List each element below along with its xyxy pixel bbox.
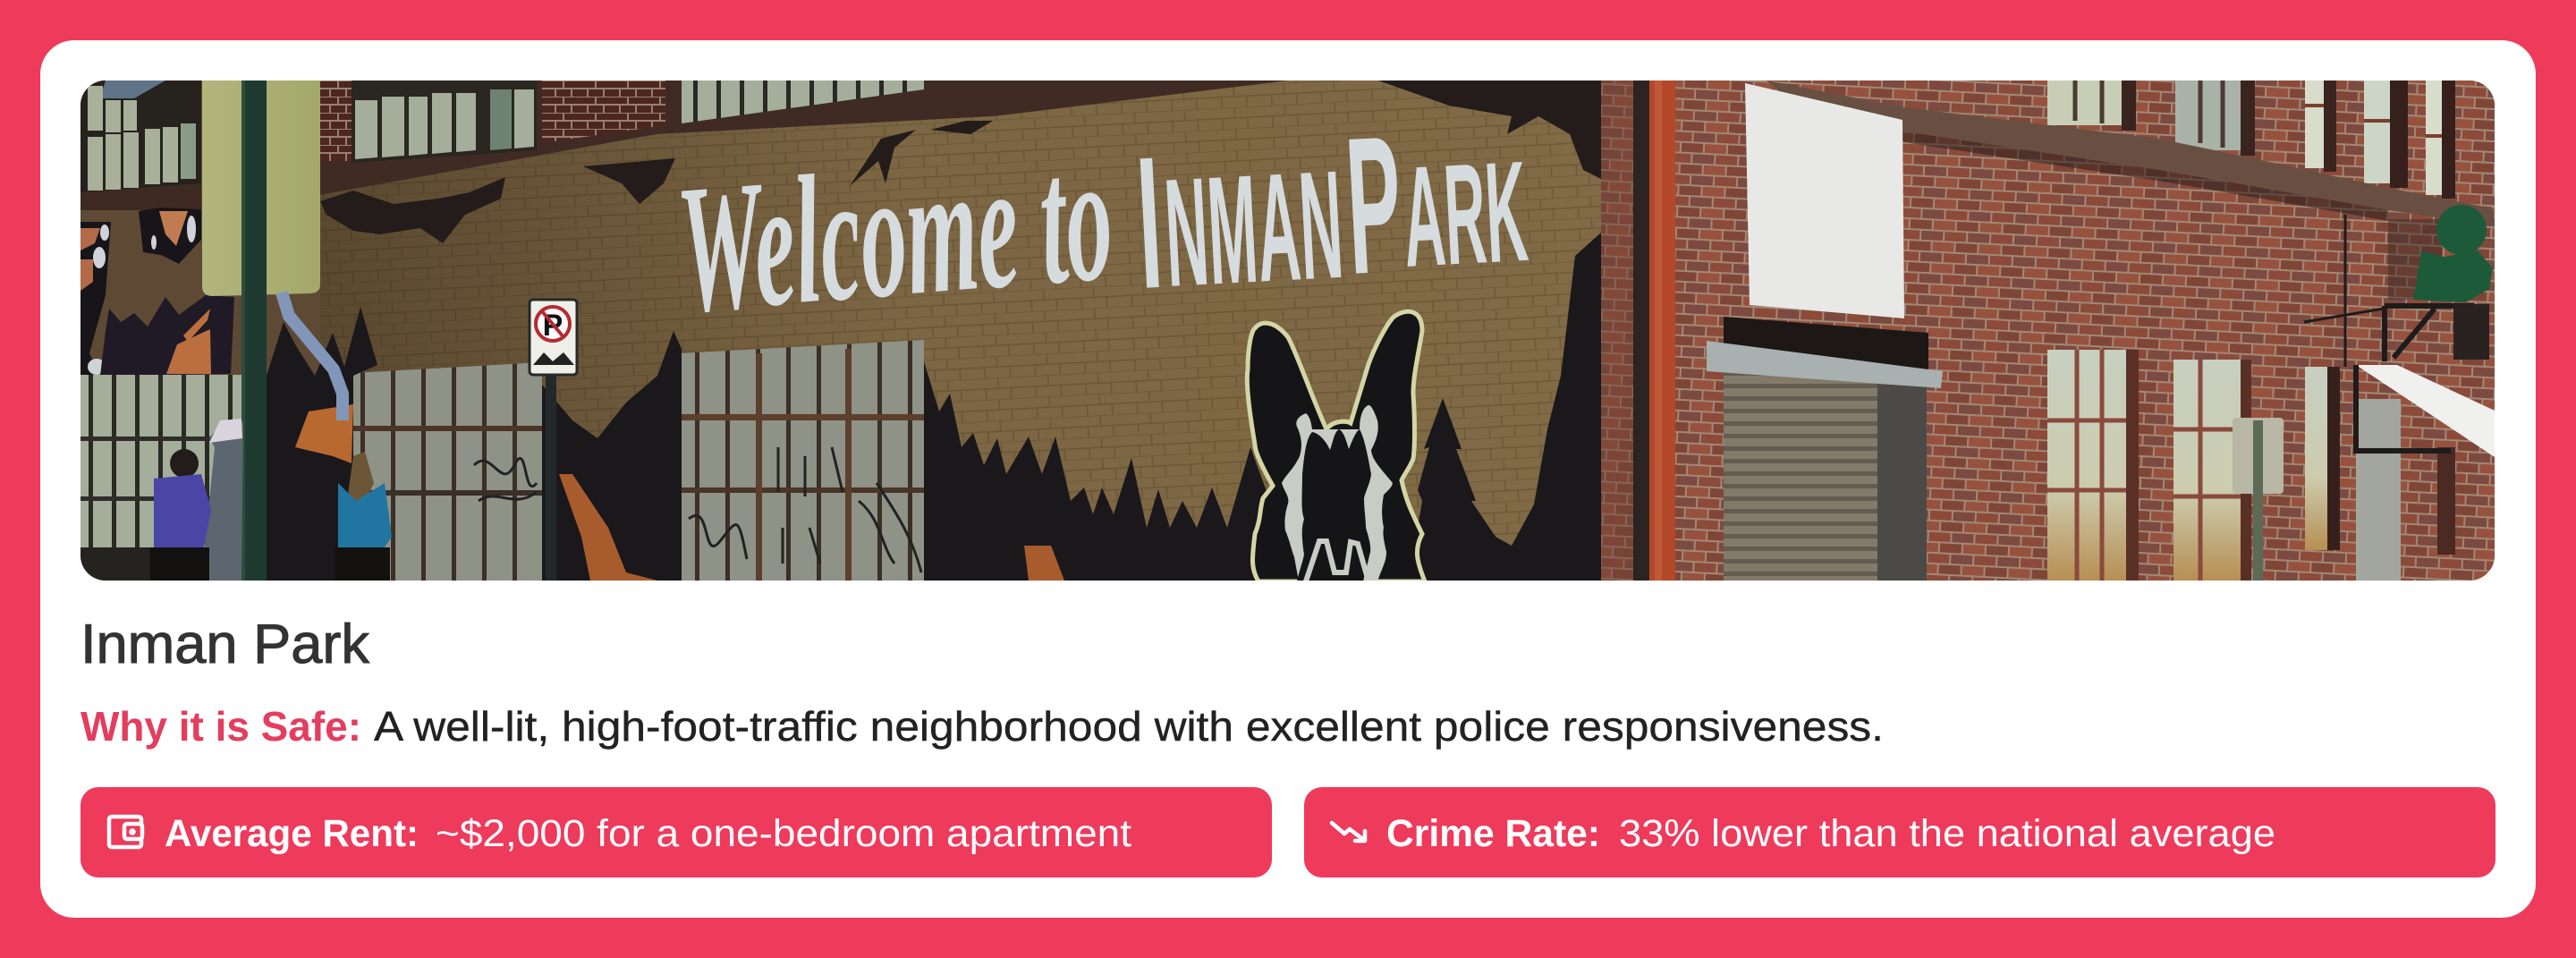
stat pill: crime rate: Crime Rate: xyxy=(1386,812,1600,855)
photo: Inman Park mural building xyxy=(80,72,2495,581)
heading: neighborhood name: Inman Park xyxy=(80,614,370,675)
upper mural windows and brick piers xyxy=(320,81,924,163)
mural rabbit-eared silhouette xyxy=(1247,311,1425,581)
three people on the sidewalk xyxy=(150,419,392,581)
black branch silhouettes xyxy=(320,81,1601,243)
green ampersand sign xyxy=(2413,205,2493,302)
stat pill: crime rate xyxy=(1304,787,2496,877)
upper dark brick band xyxy=(320,81,1377,195)
graffiti scribbles xyxy=(474,447,921,572)
mural lettering: Welcome to Inman Park xyxy=(682,138,1530,313)
mural lettering: Welcome to Inman Park: I xyxy=(1132,117,1166,328)
painted white board xyxy=(1745,83,1904,318)
stat pill: average rent: Average Rent: xyxy=(165,812,419,855)
mural lettering: Welcome to Inman Park: P xyxy=(1342,96,1406,316)
dark tree silhouettes and mural base xyxy=(267,233,1601,581)
stat pill: crime rate: 33% lower than the national average xyxy=(1619,812,2275,855)
photo: Inman Park mural building: ARK xyxy=(1399,131,1531,297)
drain pipe xyxy=(282,292,343,420)
orange butterflies in lower mural xyxy=(295,404,1064,581)
description: why it is safe: A well-lit, high-foot-traffic neighborhood with excellent police responsiveness. xyxy=(374,703,1884,750)
stat pill: average rent: ~$2,000 for a one-bedroom apartment xyxy=(436,812,1131,855)
street sign back and pole xyxy=(202,72,320,581)
loading door with metal lintel xyxy=(1707,317,1943,581)
cornice band xyxy=(1767,81,2495,225)
shop door xyxy=(2356,399,2401,581)
lower mural windows xyxy=(353,340,924,581)
mural lettering: Welcome to Inman Park: NMAN xyxy=(1161,139,1347,319)
brick building section at right xyxy=(1601,81,2495,581)
stat pill: average rent xyxy=(80,787,1272,877)
left building section with windows and butterfly xyxy=(80,81,322,581)
no parking sign and post: P xyxy=(543,309,563,343)
mural lettering: Welcome to Inman Park: Welcome to xyxy=(672,115,1119,352)
description: why it is safe: Why it is Safe: xyxy=(80,703,361,750)
right street sign back xyxy=(2233,418,2284,581)
white awning xyxy=(2356,365,2495,457)
tan painted brick wall xyxy=(320,81,1601,581)
metal sign bracket and wires xyxy=(2304,215,2489,451)
lower right windows xyxy=(2047,350,2455,581)
upper right windows and piers xyxy=(2047,81,2455,199)
icon: trending down arrow xyxy=(1332,823,1365,841)
no parking sign and post xyxy=(530,300,577,581)
icon: wallet xyxy=(109,817,142,847)
